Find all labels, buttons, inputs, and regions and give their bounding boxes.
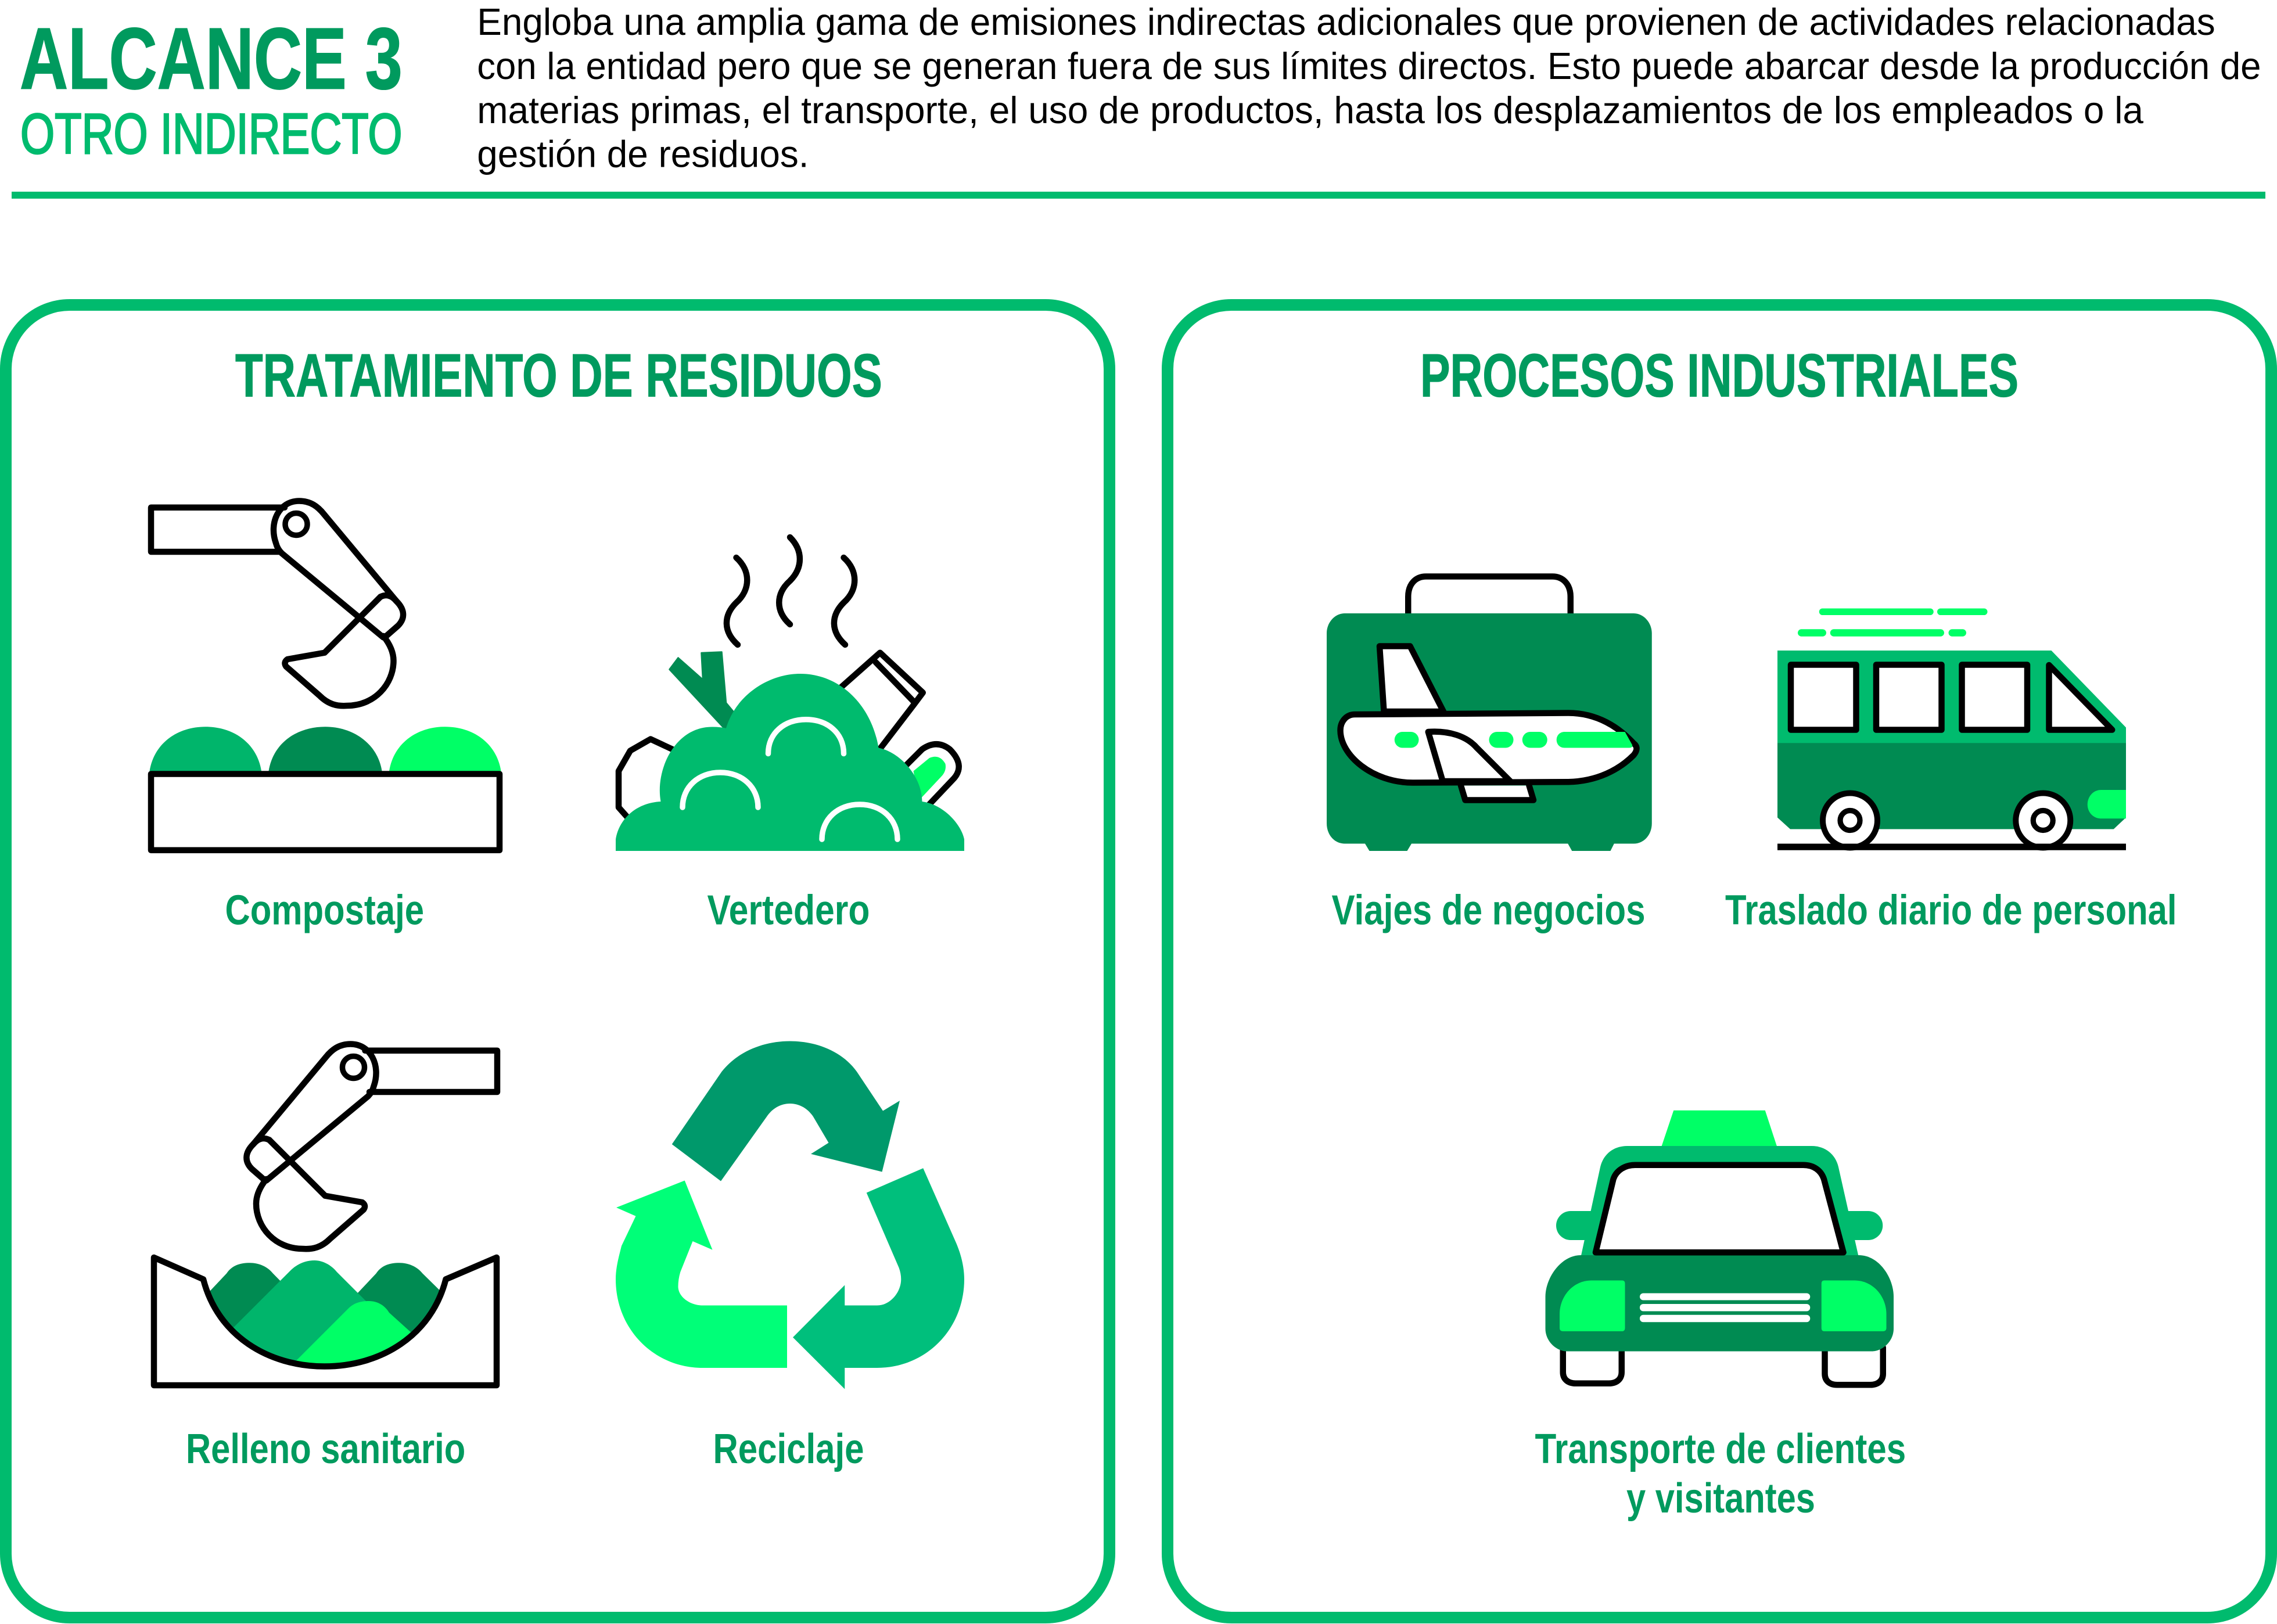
title: alcance 3: ALCANCE 3 (20, 9, 403, 107)
label: transporte de clientes y visitantes: Transporte de clientes (1535, 1425, 1906, 1472)
icon: relleno sanitario (154, 1044, 501, 1424)
icon: viajes de negocios (1327, 576, 1652, 851)
panel heading: tratamiento de residuos: TRATAMIENTO DE RESIDUOS (235, 342, 882, 410)
label: relleno sanitario: Relleno sanitario (186, 1425, 465, 1472)
subtitle: otro indirecto: OTRO INDIRECTO (20, 102, 403, 166)
label: traslado diario de personal: Traslado diario de personal (1725, 886, 2177, 933)
icon: reciclaje (616, 1041, 964, 1389)
intro text block: Engloba una amplia gama de emisiones indirectas adicionales que provienen de actividades relacionadas (477, 1, 2215, 43)
label: transporte de clientes y visitantes (1535, 1425, 1906, 1522)
intro text block: gestión de residuos. (477, 132, 809, 175)
header (12, 1, 2265, 199)
icon: compostaje (150, 501, 501, 850)
panel: procesos industriales (1168, 305, 2271, 1618)
intro text block: materias primas, el transporte, el uso de productos, hasta los desplazamientos de los empleados o la (477, 89, 2144, 131)
icon: traslado diario de personal (1777, 609, 2126, 850)
icon: vertedero (616, 537, 964, 851)
label: compostaje: Compostaje (225, 886, 424, 933)
panel: tratamiento de residuos (6, 305, 1109, 1618)
label: vertedero: Vertedero (707, 886, 870, 933)
intro text block (477, 1, 2261, 175)
label: viajes de negocios: Viajes de negocios (1331, 886, 1645, 933)
intro text block: con la entidad pero que se generan fuera de sus límites directos. Esto puede abarcar desde la producción de (477, 45, 2261, 87)
label: reciclaje: Reciclaje (713, 1425, 864, 1472)
label: transporte de clientes y visitantes: y visitantes (1626, 1475, 1815, 1522)
icon: transporte de clientes y visitantes (1545, 1111, 1894, 1385)
panel heading: procesos industriales: PROCESOS INDUSTRIALES (1420, 342, 2019, 410)
